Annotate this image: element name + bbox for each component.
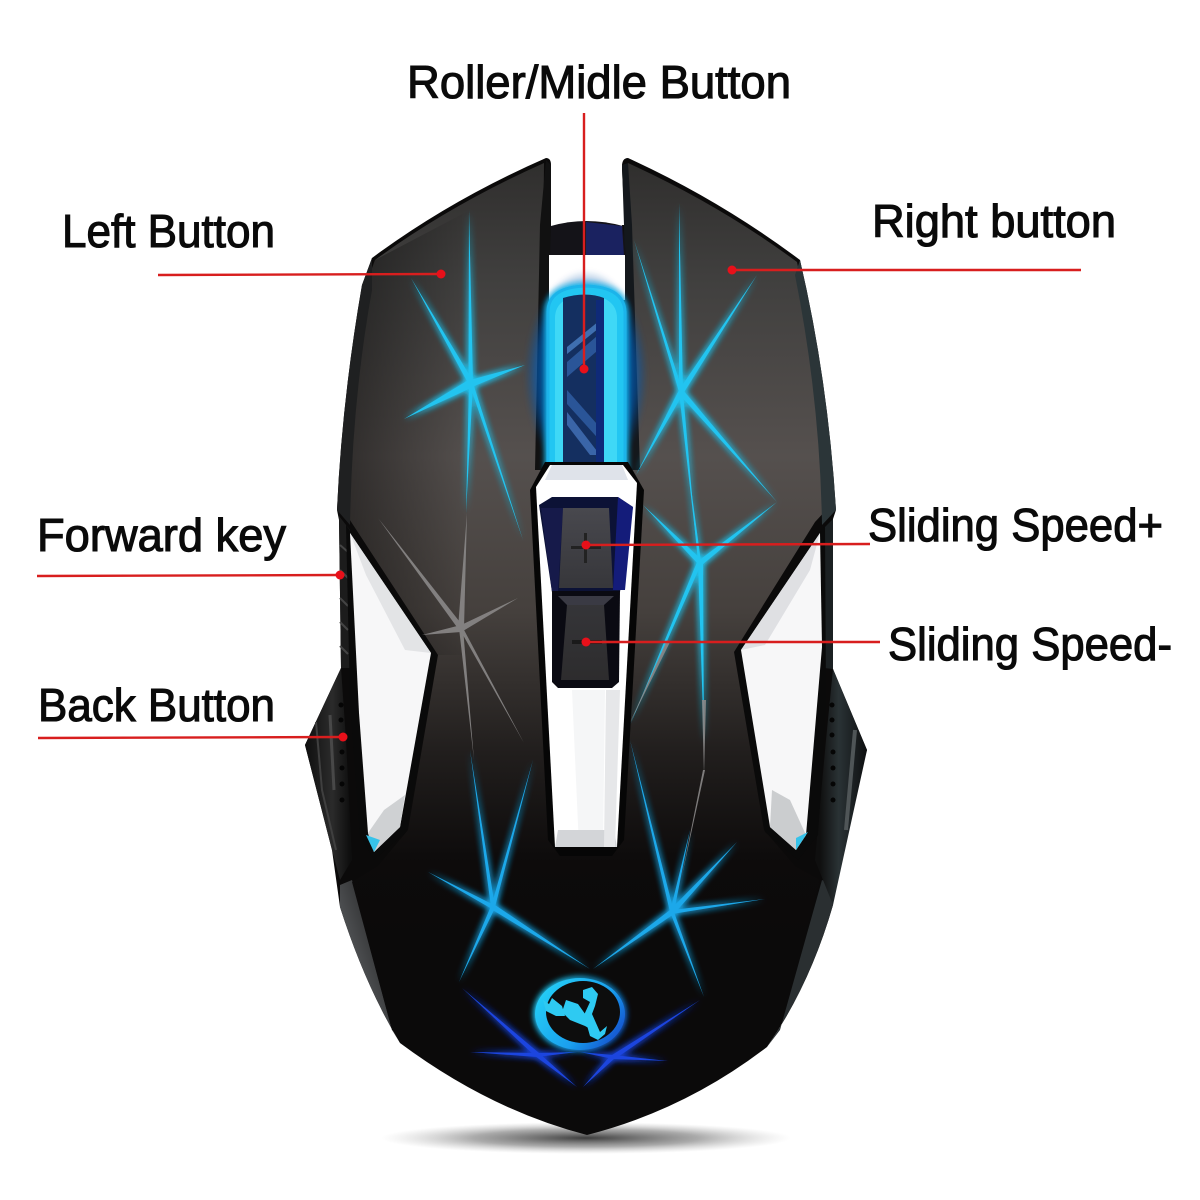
lower right facet [767, 880, 833, 1047]
roller glow ring [548, 286, 625, 470]
label: sliding speed plus: Sliding Speed+ [868, 499, 1163, 551]
left panel shading [342, 210, 470, 655]
inner slit edges [535, 160, 551, 470]
glowing light rays [404, 203, 777, 1087]
label: forward key [37, 509, 344, 580]
scorpion [543, 987, 607, 1040]
right edge facet [795, 260, 836, 525]
star: lower right [593, 740, 765, 997]
roller channel [524, 158, 648, 480]
mouse silhouette [305, 158, 867, 1135]
side grip: forward key left [339, 516, 352, 668]
label: right button: Right button [872, 195, 1116, 247]
left edge facet [337, 258, 372, 525]
top surface [342, 163, 828, 1130]
label: back button: Back Button [38, 679, 275, 731]
star: right button [634, 203, 777, 540]
label: left button [62, 205, 446, 278]
star: speed buttons [630, 480, 777, 745]
speed plus button [539, 497, 633, 592]
mouse illustration [305, 158, 867, 1135]
ground shadow [381, 1122, 791, 1154]
logo ring [535, 978, 625, 1050]
star: lower left [428, 750, 590, 982]
label: forward key: Forward key [37, 509, 286, 561]
label: roller / middle button [407, 56, 791, 374]
label: sliding speed minus [582, 618, 1172, 670]
side grip: back button left [305, 668, 352, 880]
scroll wheel [563, 294, 604, 466]
left side wing [346, 525, 437, 860]
lower left facet [340, 880, 400, 1043]
side grip: right [815, 519, 867, 905]
label: sliding speed minus: Sliding Speed- [888, 618, 1172, 670]
label: sliding speed plus [582, 499, 1163, 551]
central strip [530, 462, 644, 856]
label: back button [38, 679, 348, 742]
star: around logo [462, 988, 700, 1087]
speed minus button [552, 591, 620, 688]
label: right button [728, 195, 1116, 274]
label: left button: Left Button [62, 205, 275, 257]
grey star [378, 513, 706, 880]
logo: scorpion badge [535, 978, 625, 1050]
roller halo [524, 270, 648, 480]
right side wing [735, 525, 826, 860]
label: roller / middle button: Roller/Midle Button [407, 56, 791, 108]
star: left button [404, 210, 525, 540]
